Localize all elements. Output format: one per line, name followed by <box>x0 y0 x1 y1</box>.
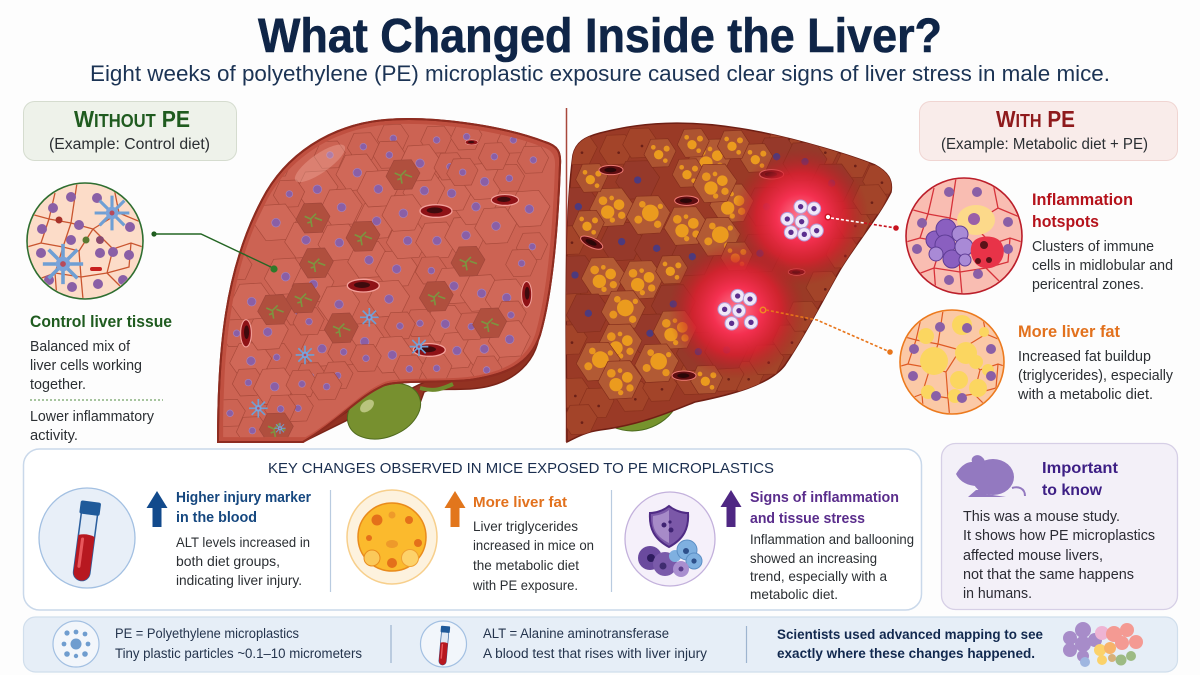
callout line: control tissue <box>151 231 278 273</box>
description: fat buildup <box>1017 349 1174 403</box>
description: fat buildup: (triglycerides), especially <box>1018 368 1174 384</box>
description: ALT: ALT levels increased in <box>176 534 310 550</box>
red hot cell <box>971 236 1004 268</box>
heading: signs of inflammation: and tissue stress <box>750 510 865 527</box>
inflammation glow lower <box>670 245 800 374</box>
description: triglycerides: Liver triglycerides <box>473 518 578 534</box>
icon: fat cell <box>347 490 437 584</box>
icon: gallbladder healthy <box>339 373 453 449</box>
heading: signs of inflammation <box>750 489 899 527</box>
immune cell cluster upper <box>781 200 823 241</box>
icon: inflammation micrograph <box>906 178 1022 294</box>
description: triglycerides: the metabolic diet <box>473 557 579 573</box>
description: balanced mix <box>30 339 142 393</box>
immune cell cluster lower <box>718 289 758 330</box>
description: balanced mix: together. <box>30 377 86 393</box>
panel: important to know <box>942 444 1178 610</box>
panel: with PE label <box>920 102 1178 160</box>
arrow: injury marker up <box>146 491 168 527</box>
purple immune cluster <box>926 219 973 268</box>
heading: control liver tissue: Control liver tissue <box>30 313 172 331</box>
description: ballooning: trend, especially with a <box>750 568 887 584</box>
callout line: fat <box>760 307 893 355</box>
heading: important to know: to know <box>1042 482 1103 499</box>
icon: microplastic particles <box>53 621 99 667</box>
caption: metabolic diet: (Example: Metabolic diet + PE) <box>941 136 1148 153</box>
description: lower inflammatory: Lower inflammatory <box>30 409 155 425</box>
note: advanced mapping <box>777 626 1043 661</box>
text block: more liver fat <box>1017 323 1174 403</box>
heading: important to know: Important <box>1042 460 1119 477</box>
description: fat buildup: Increased fat buildup <box>1018 349 1151 365</box>
liver outline PE <box>566 123 891 442</box>
heading: higher injury marker <box>176 489 311 526</box>
icon: fat micrograph <box>899 309 1005 415</box>
text block: inflammation hotspots <box>1032 191 1173 293</box>
description: triglycerides: with PE exposure. <box>472 577 578 593</box>
description: lower inflammatory <box>30 409 155 444</box>
heading: key changes: KEY CHANGES OBSERVED IN MICE EXPOSED TO PE MICROPLASTICS <box>268 460 774 477</box>
description: lower inflammatory: activity. <box>30 428 78 444</box>
immune cell star upper <box>95 196 129 230</box>
edge rim healthy <box>218 119 560 442</box>
heading: with PE: WITH PE <box>996 106 1075 132</box>
icon: gallbladder PE <box>605 400 675 431</box>
description: immune clusters: Clusters of immune <box>1032 239 1154 255</box>
callout line: inflammation <box>825 214 899 231</box>
description: ALT: both diet groups, <box>176 553 280 569</box>
icon: blood tube <box>39 488 135 588</box>
description: ALT <box>176 534 310 588</box>
heading: inflammation hotspots <box>1032 191 1133 231</box>
centre divider line <box>566 108 568 442</box>
icon: spatial map <box>1063 622 1143 667</box>
description: mouse study: in humans. <box>963 586 1032 602</box>
definition: ALT <box>483 626 707 661</box>
heading: more liver fat card: More liver fat <box>473 494 567 511</box>
note: advanced mapping: Scientists used advanced mapping to see <box>777 626 1043 642</box>
title: What Changed Inside the Liver? <box>258 10 942 63</box>
description: immune clusters: pericentral zones. <box>1032 277 1144 293</box>
heading: inflammation hotspots: hotspots <box>1032 213 1099 231</box>
icon: shield and cells <box>625 492 715 586</box>
arrow: fat up <box>444 491 466 527</box>
yellow stressed cell <box>957 205 995 235</box>
subtitle: Eight weeks of polyethylene (PE) microplastic exposure caused clear signs of liver stress in male mice. <box>90 61 1110 86</box>
description: mouse study <box>963 509 1155 602</box>
description: balanced mix: liver cells working <box>30 358 142 374</box>
heading: higher injury marker: Higher injury marker <box>176 489 311 506</box>
illustration: liver with PE <box>553 121 897 442</box>
description: mouse study: affected mouse livers, <box>963 548 1103 564</box>
icon: mouse <box>956 455 1025 497</box>
description: ballooning: showed an increasing <box>750 550 877 566</box>
description: mouse study: It shows how PE microplastics <box>963 528 1155 544</box>
panel: key changes <box>24 449 922 610</box>
panel: footer glossary <box>24 617 1178 672</box>
inflammation glow upper <box>734 155 864 280</box>
definition: PE: Tiny plastic particles ~0.1–10 micrometers <box>115 646 362 661</box>
immune cell star lower <box>43 244 83 284</box>
description: triglycerides: increased in mice on <box>473 537 594 553</box>
heading: inflammation hotspots: Inflammation <box>1032 191 1133 209</box>
description: ballooning: metabolic diet. <box>750 586 838 602</box>
description: immune clusters <box>1032 239 1173 293</box>
definition: ALT: ALT = Alanine aminotransferase <box>483 626 669 641</box>
underside of liver <box>303 325 540 442</box>
caption: control diet: (Example: Control diet) <box>49 136 210 153</box>
heading: without PE: WITHOUT PE <box>74 106 190 132</box>
icon: ALT blood tube <box>420 621 466 667</box>
liver cells healthy <box>214 118 563 444</box>
illustration: healthy liver <box>214 118 563 449</box>
description: balanced mix: Balanced mix of <box>30 339 131 355</box>
icon: control tissue micrograph <box>27 183 143 299</box>
description: ballooning: Inflammation and ballooning <box>750 531 914 547</box>
heading: signs of inflammation: Signs of inflammation <box>750 489 899 506</box>
panel: without PE label <box>24 102 236 160</box>
arrow: inflammation up <box>720 490 742 527</box>
description: ballooning <box>750 531 914 602</box>
definition: ALT: A blood test that rises with liver injury <box>483 646 707 661</box>
heading: more liver fat: More liver fat <box>1018 323 1120 341</box>
definition: PE <box>115 626 362 661</box>
description: triglycerides <box>472 518 594 593</box>
heading: important to know <box>1042 460 1119 499</box>
note: advanced mapping: exactly where these changes happened. <box>777 645 1035 661</box>
definition: PE: PE = Polyethylene microplastics <box>115 626 299 641</box>
description: immune clusters: cells in midlobular and <box>1032 258 1173 274</box>
liver cells PE with fat droplets <box>553 121 897 435</box>
liver outline <box>218 119 560 442</box>
heading: higher injury marker: in the blood <box>176 509 257 526</box>
description: mouse study: not that the same happens <box>963 567 1134 583</box>
description: mouse study: This was a mouse study. <box>963 509 1120 525</box>
description: ALT: indicating liver injury. <box>176 572 302 588</box>
text block: control liver tissue <box>30 313 172 444</box>
description: fat buildup: with a metabolic diet. <box>1017 387 1153 403</box>
